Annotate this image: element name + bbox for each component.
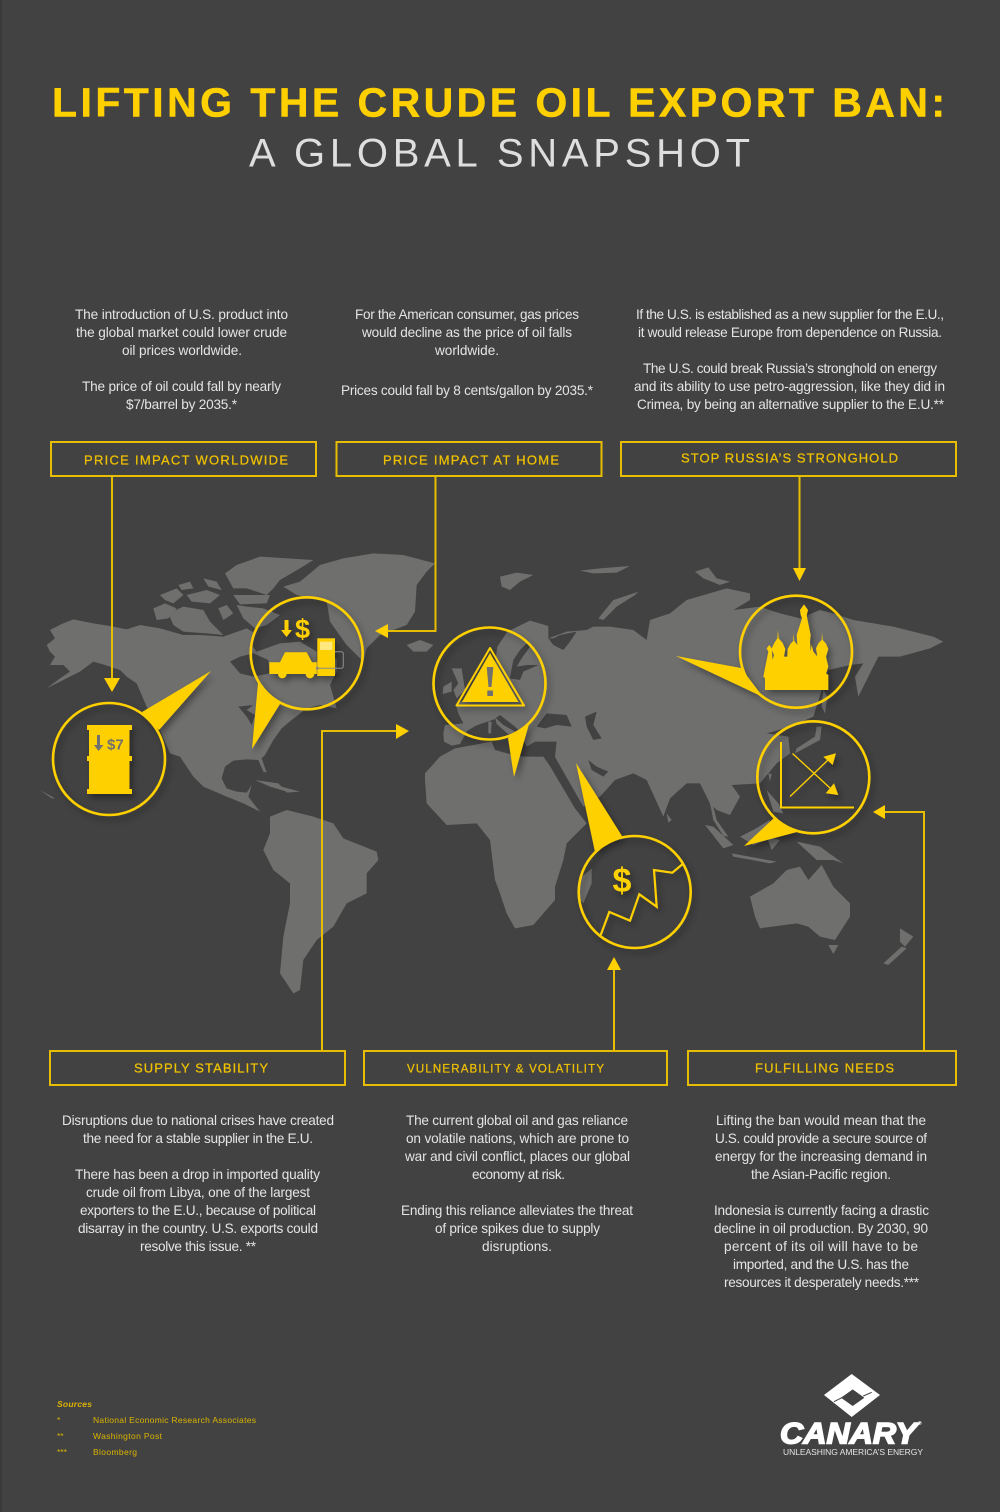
panel: stop Russia's stronghold text: The U.S. could break Russia’s stronghold on energy — [643, 361, 937, 376]
panel: supply stability text — [62, 1113, 334, 1254]
heading: stop Russia's stronghold: STOP RUSSIA’S STRONGHOLD — [681, 450, 898, 466]
panel: stop Russia's stronghold text — [634, 307, 945, 412]
panel: supply stability text: the need for a stable supplier in the E.U. — [83, 1131, 313, 1146]
icon: dollar and price spike line — [601, 862, 683, 935]
icon: Kremlin silhouette — [763, 604, 828, 690]
heading: vulnerability and volatility — [364, 1051, 667, 1085]
panel: vulnerability and volatility text: economy at risk. — [472, 1167, 565, 1182]
panel: price impact at home text: For the American consumer, gas prices — [355, 307, 579, 322]
panel: vulnerability and volatility text: on volatile nations, which are prone to — [406, 1131, 629, 1146]
heading: stop Russia's stronghold — [621, 442, 956, 476]
panel: price impact at home text: worldwide. — [434, 343, 499, 358]
heading: price impact at home: PRICE IMPACT AT HOME — [383, 452, 559, 468]
sources: *** — [57, 1447, 68, 1457]
panel: fulfilling needs text: energy for the increasing demand in — [715, 1149, 927, 1164]
arrow: worldwide to barrel — [104, 476, 120, 692]
panel: vulnerability and volatility text: war and civil conflict, places our global — [404, 1149, 630, 1164]
heading: supply stability: SUPPLY STABILITY — [134, 1060, 268, 1076]
arrow: fulfilling needs to chart — [873, 805, 924, 1051]
panel: price impact at home text: Prices could fall by 8 cents/gallon by 2035.* — [341, 383, 594, 398]
logo: Canary: UNLEASHING AMERICA’S ENERGY — [783, 1447, 923, 1457]
heading: price impact worldwide — [51, 442, 316, 476]
panel: vulnerability and volatility text: Ending this reliance alleviates the threat — [401, 1203, 633, 1218]
panel: vulnerability and volatility text — [401, 1113, 633, 1254]
arrow: vulnerability to dollar — [607, 957, 621, 1051]
panel: supply stability text: There has been a drop in imported quality — [75, 1167, 320, 1182]
callout: dollar — [576, 763, 691, 948]
panel: price impact worldwide text: the global market could lower crude — [76, 325, 287, 340]
world map — [40, 553, 943, 993]
title: A GLOBAL SNAPSHOT — [249, 132, 750, 176]
panel: fulfilling needs text: decline in oil production. By 2030, 90 — [714, 1221, 928, 1236]
sources: * — [57, 1415, 61, 1425]
title: LIFTING THE CRUDE OIL EXPORT BAN: — [52, 80, 945, 126]
panel: price impact worldwide text — [75, 307, 288, 412]
panel: vulnerability and volatility text: The current global oil and gas reliance — [406, 1113, 628, 1128]
panel: supply stability text: disarray in the country. U.S. exports could — [78, 1221, 318, 1236]
sources: National Economic Research Associates — [93, 1415, 256, 1425]
heading: fulfilling needs: FULFILLING NEEDS — [755, 1060, 894, 1076]
sources: Washington Post — [93, 1431, 163, 1441]
panel: fulfilling needs text: percent of its oil will have to be — [724, 1239, 918, 1254]
panel: fulfilling needs text: Indonesia is currently facing a drastic — [714, 1203, 929, 1218]
panel: fulfilling needs text: U.S. could provide a secure source of — [715, 1131, 927, 1146]
panel: vulnerability and volatility text: disruptions. — [482, 1239, 552, 1254]
sources: ** — [57, 1431, 64, 1441]
panel: vulnerability and volatility text: of price spikes due to supply — [435, 1221, 600, 1236]
panel: price impact at home text: would decline as the price of oil falls — [361, 325, 572, 340]
callout: barrel — [53, 671, 211, 815]
icon: oil barrel — [87, 725, 132, 794]
panel: stop Russia's stronghold text: If the U.S. is established as a new supplier for the E.U., — [636, 307, 944, 322]
panel: price impact at home text — [341, 307, 594, 398]
panel: fulfilling needs text — [714, 1113, 929, 1290]
panel: fulfilling needs text: resources it desperately needs.*** — [724, 1275, 920, 1290]
heading: fulfilling needs — [688, 1051, 956, 1085]
title — [52, 80, 945, 176]
panel: supply stability text: Disruptions due to national crises have created — [62, 1113, 334, 1128]
panel: price impact worldwide text: oil prices worldwide. — [122, 343, 242, 358]
icon: car at fuel pump: $ — [295, 614, 310, 644]
arrow: supply stability to Europe — [322, 724, 409, 1051]
panel: stop Russia's stronghold text: Crimea, by being an alternative supplier to the E.U.** — [637, 397, 945, 412]
sources: Bloomberg — [93, 1447, 137, 1457]
panel: stop Russia's stronghold text: and its ability to use petro-aggression, like they did in — [634, 379, 945, 394]
panel: stop Russia's stronghold text: it would release Europe from dependence on Russia. — [638, 325, 942, 340]
icon: car at fuel pump — [269, 614, 343, 678]
heading: price impact at home — [336, 442, 602, 476]
logo: Canary: ® — [918, 1420, 922, 1427]
icon: warning triangle — [456, 648, 524, 706]
logo: Canary — [780, 1374, 923, 1457]
panel: price impact worldwide text: The price of oil could fall by nearly — [82, 379, 281, 394]
panel: fulfilling needs text: the Asian-Pacific region. — [751, 1167, 891, 1182]
panel: supply stability text: exporters to the E.U., because of political — [80, 1203, 316, 1218]
panel: fulfilling needs text: imported, and the U.S. has the — [733, 1257, 909, 1272]
arrow: Russia to Kremlin — [793, 476, 806, 581]
callout: Russia — [676, 596, 852, 708]
heading: supply stability — [50, 1051, 345, 1085]
heading: price impact worldwide: PRICE IMPACT WORLDWIDE — [84, 452, 288, 468]
callout: warning — [434, 628, 546, 777]
sources — [57, 1399, 256, 1457]
logo: Canary: CANARY — [780, 1418, 920, 1450]
heading: vulnerability and volatility: VULNERABILITY & VOLATILITY — [407, 1064, 604, 1076]
arrow: home to gas pump — [375, 476, 436, 638]
icon: oil barrel: $7 — [107, 736, 124, 754]
callout: chart — [744, 721, 869, 846]
panel: supply stability text: resolve this issue. ** — [140, 1239, 257, 1254]
callout: gas pump — [251, 597, 363, 749]
icon: crossing trend arrows — [781, 742, 854, 808]
panel: supply stability text: crude oil from Libya, one of the largest — [86, 1185, 310, 1200]
panel: price impact worldwide text: $7/barrel by 2035.* — [126, 397, 238, 412]
panel: fulfilling needs text: Lifting the ban would mean that the — [716, 1113, 926, 1128]
sources: Sources — [57, 1399, 92, 1409]
icon: dollar and price spike line: $ — [613, 862, 632, 900]
panel: price impact worldwide text: The introduction of U.S. product into — [75, 307, 288, 322]
